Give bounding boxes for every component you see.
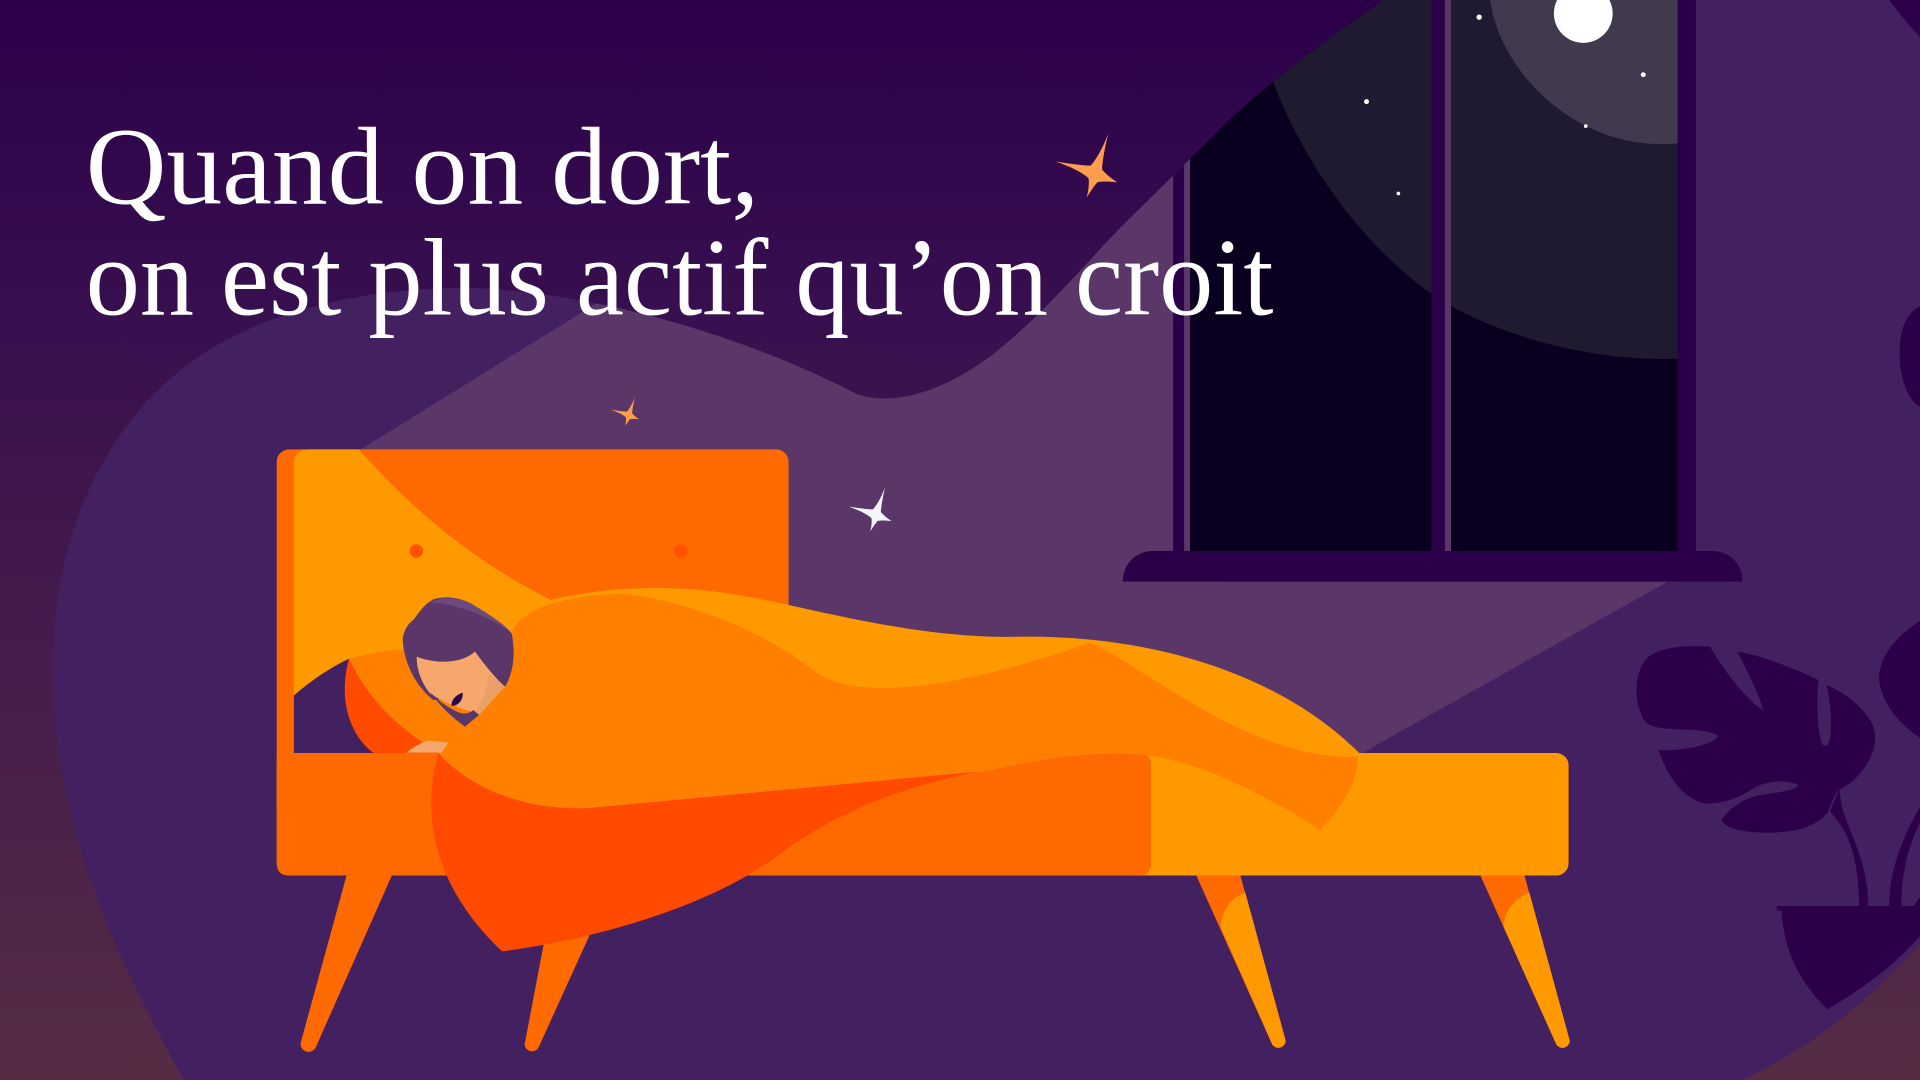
window bbox=[1173, 0, 1696, 557]
title bbox=[86, 105, 1273, 339]
headboard bbox=[277, 449, 789, 817]
face bbox=[417, 652, 505, 715]
headboard button right bbox=[674, 544, 688, 558]
sparkle star large orange bbox=[1056, 133, 1117, 197]
window frame bbox=[1173, 0, 1696, 557]
moon glow inner bbox=[1490, 0, 1678, 144]
mouth bbox=[452, 693, 463, 706]
bed base left bbox=[277, 753, 1151, 876]
leg middle right highlight bbox=[1221, 893, 1286, 1048]
title line 2: on est plus actif qu’on croit bbox=[86, 217, 1273, 339]
right stem bbox=[1889, 807, 1920, 906]
headboard button left bbox=[410, 544, 423, 558]
blanket orange layer bbox=[349, 594, 1358, 830]
blanket top light layer bbox=[551, 588, 1359, 830]
gap beneath pillow bbox=[294, 659, 373, 753]
night stars bbox=[1364, 14, 1646, 195]
bed bbox=[277, 449, 1570, 1052]
headboard lit area bbox=[294, 449, 551, 753]
window sill bbox=[1123, 551, 1742, 582]
monstera leaf bbox=[1636, 646, 1875, 833]
bed legs bbox=[301, 876, 1570, 1052]
moon bbox=[1554, 0, 1613, 43]
sparkle star white bbox=[849, 487, 892, 532]
sleeper bbox=[403, 597, 514, 753]
pillow fold bbox=[345, 659, 465, 753]
blanket red underside bbox=[431, 753, 980, 951]
left stem bbox=[1830, 788, 1868, 908]
chin hair bbox=[430, 692, 479, 727]
hair bbox=[403, 597, 514, 700]
sparkle star small orange bbox=[611, 397, 639, 426]
window glass panes bbox=[1190, 0, 1678, 551]
potted plant silhouette bbox=[1636, 306, 1920, 1009]
leg back left bbox=[525, 912, 600, 1051]
moonlight beam bbox=[361, 176, 1668, 753]
bed base right bbox=[277, 753, 1569, 876]
plant: upper right leaf bbox=[1900, 306, 1920, 407]
leg far right highlight bbox=[1504, 893, 1570, 1048]
hand bbox=[407, 741, 448, 753]
right leaf bbox=[1879, 621, 1920, 738]
title line 1: Quand on dort, bbox=[86, 105, 759, 227]
hair highlight bbox=[430, 598, 512, 633]
neck shadow bbox=[475, 673, 505, 715]
blanket bbox=[349, 588, 1359, 951]
leg far right bbox=[1480, 876, 1570, 1048]
leg middle right bbox=[1196, 876, 1286, 1048]
pot bbox=[1777, 906, 1920, 1009]
leg front left bbox=[301, 876, 392, 1052]
plant: big leaves and pot bbox=[1636, 613, 1920, 1009]
small stem bbox=[1914, 898, 1920, 906]
frame highlights bbox=[1184, 0, 1451, 557]
moon glow outer bbox=[1273, 0, 1678, 359]
